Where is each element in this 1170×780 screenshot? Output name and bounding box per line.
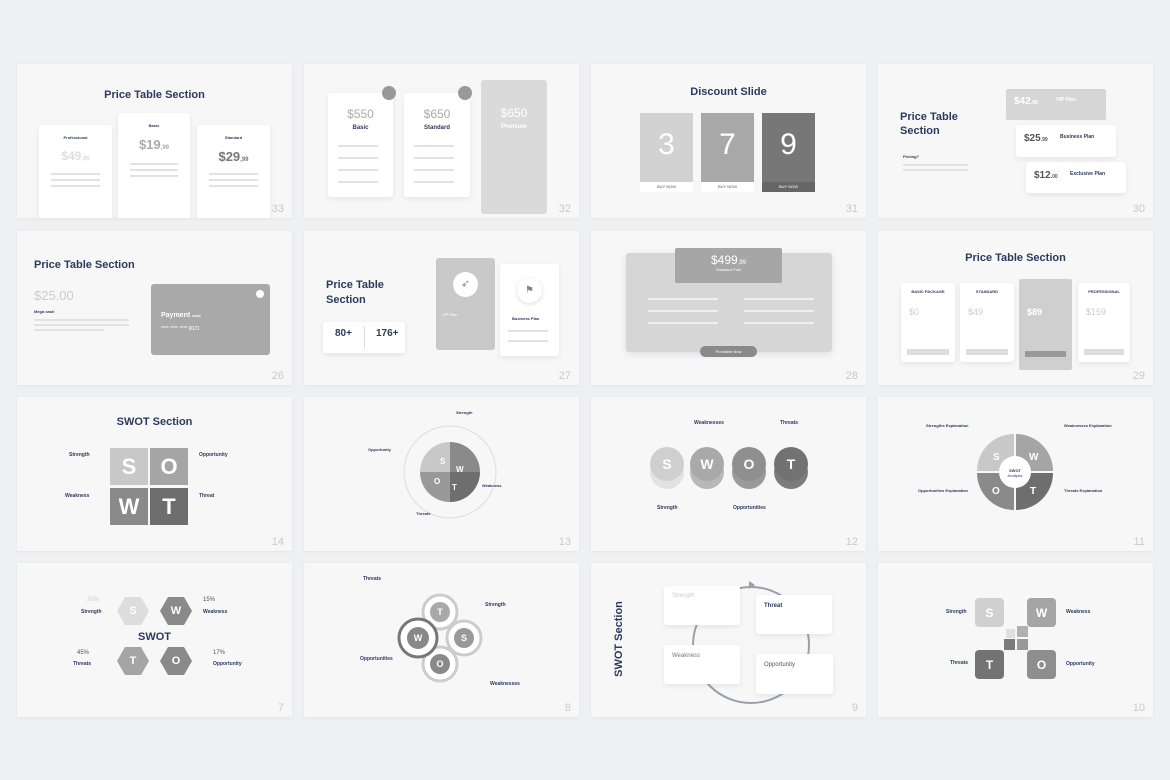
slide 14: swot section squares: Opportunity — [199, 452, 228, 458]
column: professional — [1078, 283, 1130, 362]
title: Price Table — [900, 111, 958, 123]
price box — [675, 248, 782, 283]
column: premium — [1019, 279, 1072, 370]
slide 8: swot rings — [304, 563, 579, 717]
swot grid — [110, 448, 188, 525]
squares: S — [985, 606, 994, 620]
card: 7 — [701, 113, 754, 192]
column: basic: $0 — [909, 307, 919, 317]
swot quadrants: S — [993, 452, 1000, 463]
slide 8: swot rings: Strength — [485, 602, 506, 608]
slide 10: swot squares connected: Opportunity — [1066, 661, 1095, 667]
swot quadrants: T — [1030, 486, 1036, 497]
card: professional — [39, 125, 112, 225]
box: opportunity: Opportunity — [764, 662, 795, 668]
slide 31: discount slide: 31 — [846, 203, 858, 215]
card: basic — [118, 113, 190, 225]
slide 29: price table columns: 29 — [1133, 370, 1145, 382]
box: threat: Threat — [764, 603, 782, 609]
slide 33: price table section — [17, 64, 292, 218]
title: Price Table — [326, 279, 384, 291]
labels: Strength — [456, 410, 472, 415]
card: business plan — [500, 264, 559, 356]
slide 28: standard plan: 28 — [846, 370, 858, 382]
column: standard — [960, 283, 1014, 362]
slide 14: swot section squares: Threat — [199, 493, 214, 499]
hexagons: O — [172, 655, 180, 667]
card: basic: Basic — [352, 125, 368, 131]
card: vip plan — [1006, 89, 1106, 120]
swot pie: W — [456, 465, 464, 474]
card: vip plan: VIP Plan — [1056, 97, 1076, 103]
title: Section — [900, 125, 940, 137]
swot grid: T — [162, 494, 176, 518]
card: standard: Standard — [225, 135, 242, 140]
slide 11: swot analysis circle: Threats Explanation — [1064, 488, 1102, 493]
slide 12: swot cylinders — [591, 397, 866, 551]
slide 13: swot circle: Weakness — [482, 483, 502, 488]
swot quadrants: SWOT — [1009, 468, 1022, 473]
rings: O — [436, 659, 444, 669]
card: business plan: Business Plan — [512, 316, 539, 321]
slide 8: swot rings: Weaknesses — [490, 681, 520, 687]
hexagons — [117, 597, 192, 675]
card: premium — [481, 80, 547, 214]
slide 8: swot rings: Opportunities — [360, 656, 393, 662]
hexagons: S — [129, 605, 137, 617]
labels: Strength — [69, 452, 90, 458]
card: 3 — [640, 113, 693, 192]
card: basic: Basic — [149, 123, 159, 128]
swot circles: T — [787, 456, 795, 472]
slide 13: swot circle: Threats — [416, 511, 430, 516]
icon: basic badge — [382, 86, 396, 100]
card: 3: BUY NOW — [657, 184, 676, 189]
cycle arc — [692, 581, 810, 704]
swot quadrants: O — [992, 486, 1000, 497]
payment card: Payment card — [161, 312, 201, 319]
title: Price Table Section — [104, 89, 205, 101]
payment card — [151, 284, 270, 355]
slide 7: swot hexagons — [17, 563, 292, 717]
slide 14: swot section squares: Weakness — [65, 493, 89, 499]
card: exclusive plan: Exclusive Plan — [1070, 171, 1105, 177]
rings: S — [461, 633, 467, 643]
slide 14: swot section squares: 14 — [272, 536, 284, 548]
swot circles — [650, 447, 808, 489]
slide 8: swot rings: 8 — [565, 702, 571, 714]
price: $25.00 — [34, 288, 74, 303]
column: professional: $159 — [1086, 307, 1106, 317]
card: 9: 9 — [780, 128, 797, 161]
slide 12: swot cylinders: Threats — [780, 420, 798, 426]
card: vip plan: VIP Plan — [442, 312, 458, 317]
swot quadrants — [977, 434, 1053, 510]
swot grid: S — [122, 454, 136, 478]
slide 10: swot squares connected: Threats — [950, 660, 968, 666]
slide 13: swot circle: Opportunity — [368, 447, 391, 452]
title: Section — [326, 294, 366, 306]
slide 27: vip plan — [304, 231, 579, 385]
box: strength — [664, 586, 740, 625]
title — [900, 111, 958, 137]
card: business plan: Business Plan — [1060, 134, 1094, 140]
rings — [398, 594, 482, 682]
card: 7: 7 — [719, 128, 736, 161]
labels: Weaknesses — [694, 420, 724, 426]
slide 30: price table plans — [878, 64, 1153, 218]
swot circles: W — [700, 456, 714, 472]
card: business plan: $25.99 — [1024, 133, 1048, 144]
title: Price Table Section — [34, 259, 135, 271]
column: basic: BASIC PACKAGE — [911, 289, 945, 294]
stat boxes: 176+ — [376, 328, 399, 339]
title — [326, 279, 384, 306]
column: standard: STANDARD — [976, 289, 998, 294]
card: standard: Standard — [424, 125, 450, 131]
slide 28: standard plan — [591, 231, 866, 385]
labels: Threats — [363, 576, 381, 582]
slide 14: swot section squares — [17, 397, 292, 551]
card: standard: $29,99 — [218, 149, 249, 164]
swot circles: S — [662, 456, 672, 472]
slide 32: price cards — [304, 64, 579, 218]
stat boxes: 80+ — [335, 328, 352, 339]
column: standard: $49 — [968, 307, 983, 317]
card: vip plan: $42.99 — [1014, 96, 1038, 107]
slide 11: swot analysis circle: Opportunities Explanation — [918, 488, 968, 493]
slide 11: swot analysis circle: 11 — [1134, 536, 1145, 548]
icon: standard badge — [458, 86, 472, 100]
column: professional: PROFESSIONAL — [1088, 289, 1120, 294]
card: 7: BUY NOW — [718, 184, 737, 189]
card: basic: $19,99 — [139, 137, 169, 152]
card: standard: $650 — [424, 107, 450, 121]
title: Price Table Section — [965, 252, 1066, 264]
price box: $499,99 — [711, 253, 746, 267]
slide 9: swot section cycle: 9 — [852, 702, 858, 714]
swot pie: T — [452, 483, 457, 492]
card: vip plan — [436, 258, 495, 350]
card: vip plan: ➶ — [461, 278, 470, 290]
slide 32: price cards: 32 — [559, 203, 571, 215]
slide 11: swot analysis circle: Weaknesses Explanation — [1064, 423, 1112, 428]
card: professional: Professional — [63, 135, 88, 140]
slide 13: swot circle — [304, 397, 579, 551]
slide 7: swot hexagons: 15% — [203, 597, 215, 603]
box: strength: Strength — [672, 593, 695, 599]
card: business plan: ⚑ — [525, 285, 534, 296]
slide 12: swot cylinders: Strength — [657, 505, 678, 511]
box: weakness — [664, 645, 740, 684]
column: premium: $89 — [1027, 307, 1042, 317]
labels: Strengths Explanation — [926, 423, 968, 428]
slide 7: swot hexagons: Strength — [81, 609, 102, 615]
slide 12: swot cylinders: 12 — [846, 536, 858, 548]
slide 9: swot section cycle — [591, 563, 866, 717]
swot pie: S — [440, 457, 446, 466]
card: professional: $49,99 — [61, 149, 90, 163]
swot circles: O — [744, 456, 754, 472]
slide 26: payment card: Mega cash — [34, 309, 54, 314]
slide 7: swot hexagons: Threats — [73, 661, 91, 667]
title: SWOT Section — [117, 416, 192, 428]
payment card: **** **** **** 9021 — [161, 326, 200, 332]
swot grid: O — [160, 454, 178, 478]
slide 33: price table section: 33 — [272, 203, 284, 215]
card: exclusive plan: $12.00 — [1034, 170, 1058, 181]
price box: Standard Plan — [716, 267, 741, 272]
card: 9: BUY NOW — [779, 184, 798, 189]
card: standard — [197, 125, 270, 225]
slide 10: swot squares connected — [878, 563, 1153, 717]
slide 7: swot hexagons: 17% — [213, 650, 225, 656]
slide 7: swot hexagons: 7 — [278, 702, 284, 714]
card: 9 — [762, 113, 815, 192]
stat boxes — [323, 322, 405, 353]
slide 12: swot cylinders: Opportunities — [733, 505, 766, 511]
slide 26: payment card — [17, 231, 292, 385]
swot quadrants: W — [1029, 452, 1039, 463]
panel — [626, 253, 832, 352]
slide 26: payment card: 26 — [272, 370, 284, 382]
card: premium: $650 — [501, 106, 527, 120]
slide 7: swot hexagons: Weakness — [203, 609, 227, 615]
box: weakness: Weakness — [672, 653, 700, 659]
swot quadrants: Analysis — [1008, 473, 1022, 478]
labels: Strength — [946, 609, 967, 615]
slide 30: price table plans: Pricing? — [903, 154, 919, 159]
title: Discount Slide — [690, 86, 767, 98]
squares: O — [1037, 658, 1046, 672]
button: Purchase Now — [715, 349, 742, 354]
rings: T — [437, 607, 443, 617]
card: premium: Premium — [501, 124, 527, 130]
slide 11: swot analysis circle — [878, 397, 1153, 551]
slide 30: price table plans: 30 — [1133, 203, 1145, 215]
column: basic — [901, 283, 955, 362]
swot pie: O — [434, 477, 440, 486]
box: threat — [756, 595, 832, 634]
slide 29: price table columns — [878, 231, 1153, 385]
box: opportunity — [756, 654, 833, 694]
slide 31: discount slide — [591, 64, 866, 218]
card: basic: $550 — [347, 107, 374, 121]
slide 13: swot circle: 13 — [559, 536, 571, 548]
squares: T — [986, 658, 993, 672]
button — [700, 346, 757, 357]
slide 10: swot squares connected: 10 — [1133, 702, 1145, 714]
swot grid: W — [119, 494, 139, 518]
center label: SWOT — [138, 631, 171, 643]
hexagons: W — [171, 605, 181, 617]
card: 3: 3 — [658, 128, 675, 161]
slide 7: swot hexagons: Opportunity — [213, 661, 242, 667]
card: standard — [404, 93, 470, 197]
card: exclusive plan — [1026, 162, 1126, 193]
card: basic — [328, 93, 393, 197]
slide 7: swot hexagons: 45% — [77, 650, 89, 656]
slide 27: vip plan: 27 — [559, 370, 571, 382]
rings: W — [414, 633, 423, 643]
card: business plan — [1016, 125, 1116, 157]
slide 10: swot squares connected: Weakness — [1066, 609, 1090, 615]
stats: 20% — [87, 597, 99, 603]
swot pie — [404, 426, 496, 518]
squares — [975, 598, 1056, 679]
vertical title: SWOT Section — [613, 601, 625, 677]
squares: W — [1036, 606, 1047, 620]
hexagons: T — [130, 655, 136, 667]
